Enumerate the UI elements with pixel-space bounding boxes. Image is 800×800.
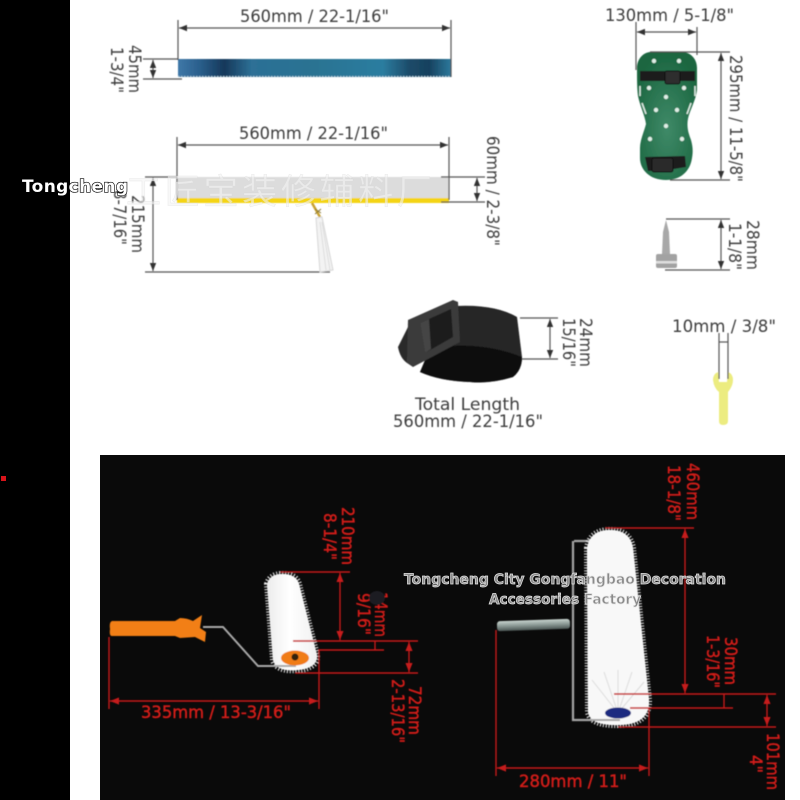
strap with buckle and dimensions	[393, 300, 595, 432]
watermark: factory name	[404, 572, 726, 608]
shoe sole with dimensions: 295mm / 11-5/8"	[725, 55, 745, 182]
small roller with dimensions: 335mm / 13-3/16"	[141, 703, 291, 723]
small roller with dimensions: 2-13/16"	[387, 679, 407, 743]
total length label: 560mm / 22-1/16"	[393, 412, 543, 432]
blue spiked bar with dimensions	[106, 7, 451, 93]
blue spiked bar with dimensions: 45mm	[124, 45, 144, 93]
small roller with dimensions: 9/16"	[353, 593, 373, 635]
watermark: Tongcheng label: Tongcheng	[22, 177, 128, 197]
strap with buckle and dimensions: 24mm	[575, 318, 595, 367]
grey and yellow scraper bar with dimensions: 60mm / 2-3/8"	[482, 136, 502, 246]
blue spiked bar with dimensions: 560mm / 22-1/16"	[240, 7, 389, 27]
icon: tassel cord	[312, 203, 333, 272]
grey and yellow scraper bar with dimensions: 560mm / 22-1/16"	[239, 124, 388, 144]
shoe sole with dimensions: 130mm / 5-1/8"	[605, 6, 734, 26]
watermark: factory name: Tongcheng City Gongfangbao Decoration	[404, 572, 726, 588]
yellow pin with dimension: 10mm / 3/8"	[672, 317, 776, 337]
smudge over label	[369, 591, 385, 605]
small roller with dimensions: 210mm	[337, 507, 357, 565]
icon: black strap and buckle	[398, 300, 522, 382]
large roller with dimensions: 101mm	[762, 733, 782, 790]
metal spike with dimensions: 28mm	[742, 220, 762, 270]
left black band	[0, 0, 70, 800]
small roller with dimensions: 14mm	[370, 592, 390, 637]
shoe sole with dimensions	[605, 6, 745, 182]
large roller with dimensions: 30mm	[720, 637, 740, 685]
watermark: factory name: Accessories Factory	[489, 592, 642, 608]
panel: white specification area	[106, 6, 776, 432]
large roller with dimensions: 280mm / 11"	[519, 772, 627, 792]
grey and yellow scraper bar with dimensions: 215mm	[127, 195, 147, 253]
total length label: Total Length	[414, 395, 520, 415]
icon: yellow pin	[713, 372, 733, 425]
grey and yellow scraper bar with dimensions: 8-7/16"	[109, 190, 129, 245]
small roller with dimensions	[109, 507, 424, 743]
large roller with dimensions: 1-3/16"	[702, 635, 722, 688]
icon: screw spike	[656, 220, 677, 268]
large roller with dimensions: 4"	[745, 755, 765, 773]
red dot marker	[1, 476, 6, 481]
grey and yellow scraper bar with dimensions	[109, 124, 502, 272]
small roller with dimensions: 8-1/4"	[319, 513, 339, 560]
icon: large spiked roller	[497, 530, 649, 725]
icon: green spiked shoe	[637, 52, 697, 180]
faint Chinese watermark: 工匠宝装修辅料厂	[126, 164, 432, 215]
total length label	[393, 395, 543, 432]
icon: small spiked roller	[110, 574, 317, 670]
small roller with dimensions: 72mm	[404, 686, 424, 735]
metal spike with dimensions: 1-1/8"	[724, 223, 744, 270]
panel: black roller photo area	[100, 455, 785, 800]
blue spiked bar with dimensions: 1-3/4"	[106, 47, 126, 93]
large roller with dimensions: 18-1/8"	[663, 465, 683, 521]
large roller with dimensions	[496, 463, 782, 792]
large roller with dimensions: 460mm	[682, 463, 702, 520]
yellow pin with dimension	[672, 317, 776, 425]
metal spike with dimensions	[656, 219, 762, 270]
strap with buckle and dimensions: 15/16"	[558, 318, 578, 367]
